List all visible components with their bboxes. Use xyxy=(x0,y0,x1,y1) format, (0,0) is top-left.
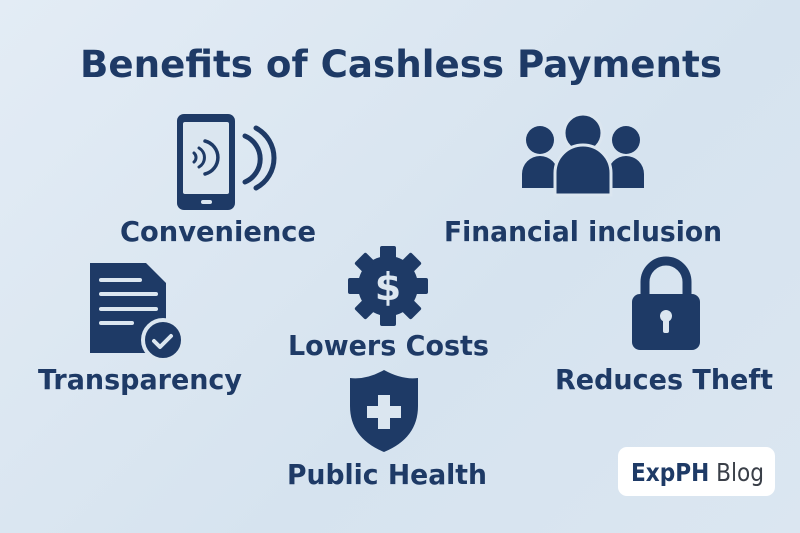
icon: gear with dollar xyxy=(348,246,428,326)
title: Benefits of Cashless Payments xyxy=(80,43,722,86)
icon: shield with cross xyxy=(350,370,418,452)
label: Financial inclusion: Financial inclusion xyxy=(444,215,722,248)
icon: phone with contactless waves xyxy=(177,114,274,210)
label: Reduces Theft: Reduces Theft xyxy=(555,363,773,396)
icon: gear with dollar: $ xyxy=(375,265,401,309)
badge: ExpPH Blog: ExpPH Blog xyxy=(631,458,764,487)
label: Transparency: Transparency xyxy=(38,363,242,396)
label: Convenience: Convenience xyxy=(120,215,316,248)
icon: document with check xyxy=(90,263,183,360)
icon: people group xyxy=(522,114,644,195)
label: Public Health: Public Health xyxy=(287,458,487,491)
label: Lowers Costs: Lowers Costs xyxy=(288,329,489,362)
icon: padlock xyxy=(632,261,700,350)
badge: ExpPH Blog xyxy=(618,447,775,496)
